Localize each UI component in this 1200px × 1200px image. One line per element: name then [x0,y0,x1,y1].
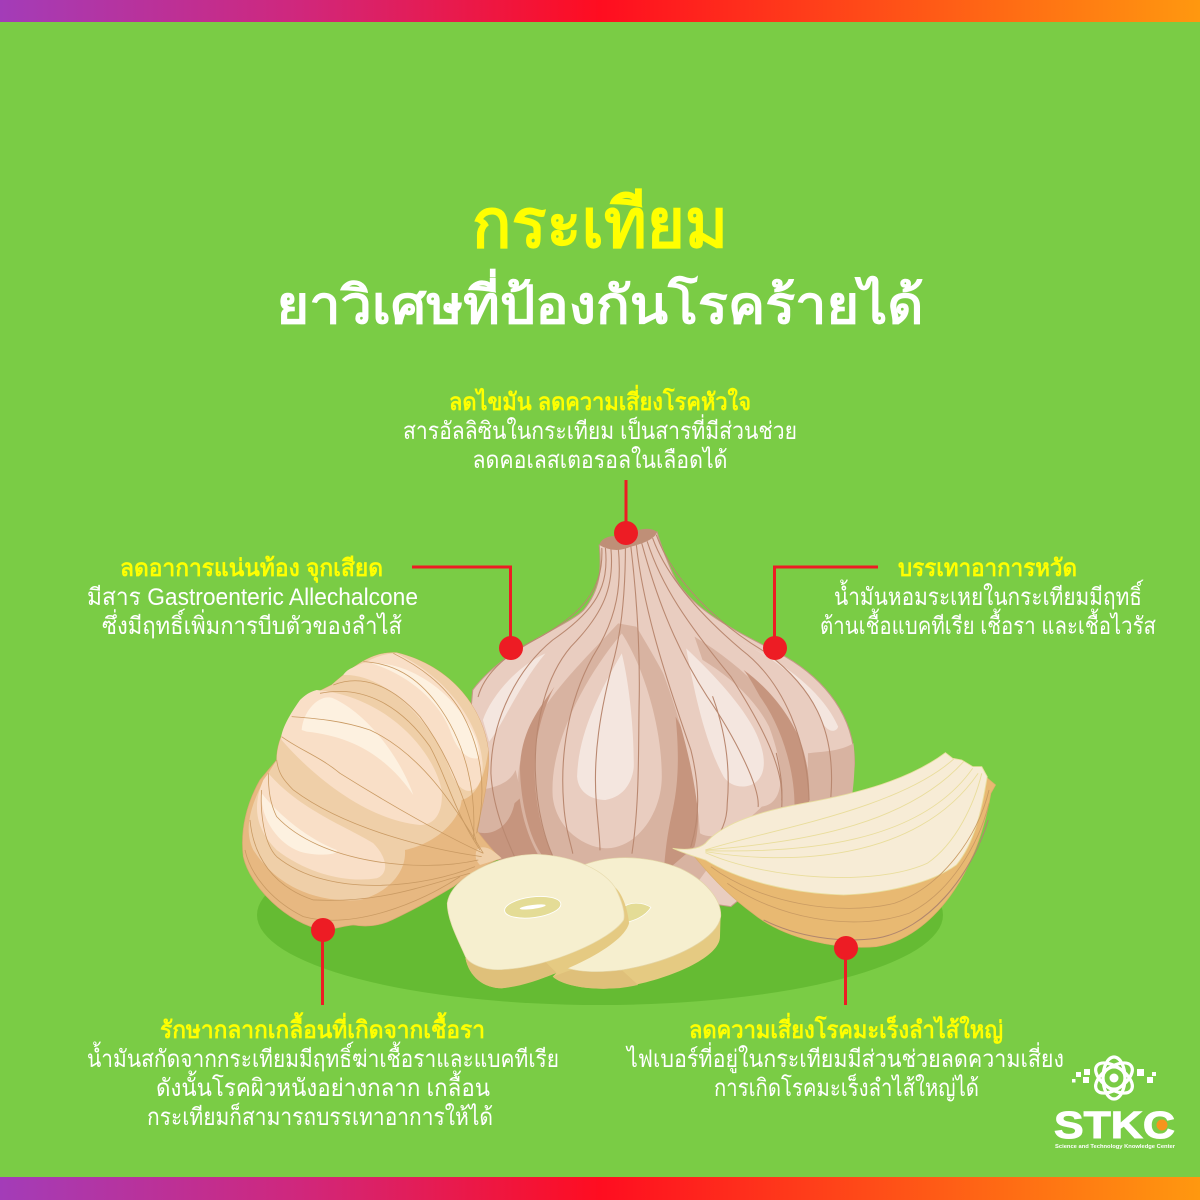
text block: bottom right benefit [625,1012,1064,1102]
front slice shaded rim [465,953,556,988]
wedge skin [695,773,996,947]
callout marker: right [763,567,878,660]
wedge face ribs [705,758,982,878]
illustration: whole garlic bulb [462,529,855,907]
bulb highlights [483,642,838,800]
clove light tone [257,653,483,880]
bulb ribs [478,535,832,863]
heading: left benefit: ลดอาการแน่นท้อง จุกเสียด [120,555,383,584]
heading: top benefit: ลดไขมัน ลดความเสี่ยงโรคหัวใจ [449,384,751,416]
bulb dark streaks [520,670,809,873]
clove mid tone [249,653,488,900]
back slice [553,858,721,989]
text block: bottom left benefit [87,1011,559,1131]
wedge skin ribs [711,790,989,922]
top gradient bar [0,0,1200,22]
bottom gradient bar [0,1177,1200,1200]
back slice face [564,858,721,972]
callout marker: bottom left [311,918,335,1005]
body: left line 1: มีสาร Gastroenteric Allechalcone [87,584,418,611]
callout marker: bottom right [834,936,858,1005]
heading: bottom right benefit: ลดความเสี่ยงโรคมะเร็งลำไส้ใหญ่ [689,1012,1003,1044]
back slice core [622,903,651,923]
heading: bottom left benefit: รักษากลากเกลื้อนที่เกิดจากเชื้อรา [160,1011,485,1044]
bulb right shaded band [695,637,810,830]
front slice core [503,893,562,921]
body: bottom right line 2: การเกิดโรคมะเร็งลำไส้ใหญ่ได้ [714,1073,979,1102]
text block: top benefit [403,384,797,474]
body: top line 1: สารอัลลิซินในกระเทียม เป็นสารที่มีส่วนช่วย [403,414,797,445]
connector lines and markers [311,480,878,1005]
wedge inner face [673,753,987,895]
illustration: garlic slices [447,854,721,989]
bulb far right lower tone [807,743,855,810]
back slice shaded rim [553,970,638,989]
callout marker: left [412,567,523,660]
front slice face [447,854,624,970]
bulb center lobe [552,633,662,848]
callout marker: top [614,480,638,545]
text block: left benefit [87,555,418,640]
ground shadow [257,825,943,1005]
clove body [242,653,500,930]
front slice rim [465,887,629,988]
bulb lower left dark [476,797,560,880]
illustration: peeled clove wedge [673,753,996,947]
bulb body [462,532,855,907]
logo icon: atom [1072,1057,1156,1099]
body: top line 2: ลดคอเลสเตอรอลในเลือดได้ [472,446,728,474]
clove ribs [245,653,483,920]
heading: right benefit: บรรเทาอาการหวัด [898,555,1077,582]
logo: STKC [1054,1057,1176,1150]
bulb left lower tone [476,770,524,840]
body: bottom left line 3: กระเทียมก็สามารถบรรเทาอาการให้ได้ [147,1102,493,1131]
text block: right benefit [820,555,1156,640]
body: right line 1: น้ำมันหอมระเหยในกระเทียมมีฤทธิ์ [834,579,1144,611]
subtitle: ยาวิเศษที่ป้องกันโรคร้ายได้ [276,269,924,335]
bulb right lobe [647,633,781,836]
front slice [447,854,629,988]
clove highlights [262,663,479,855]
title line: garlic: กระเทียม [472,186,728,262]
front slice hole [519,903,546,911]
bulb central shaded band [518,623,724,887]
logo accent dot [1156,1120,1168,1130]
clove tip light [476,847,502,865]
wedge outer edge [764,820,988,940]
bulb stem top [599,529,657,550]
logo wordmark: STKC [1054,1105,1175,1147]
back slice rim [553,913,721,989]
body: bottom left line 2: ดังนั้นโรคผิวหนังอย่างกลาก เกลื้อน [156,1070,490,1102]
body: left line 2: ซึ่งมีฤทธิ์เพิ่มการบีบตัวของลำไส้ [102,608,402,640]
body: bottom left line 1: น้ำมันสกัดจากกระเทียมมีฤทธิ์ฆ่าเชื้อราและแบคทีเรีย [87,1041,559,1073]
illustration: whole clove [242,653,502,930]
logo tagline: Science and Technology Knowledge Center [1055,1144,1176,1150]
title [276,186,924,335]
body: bottom right line 1: ไฟเบอร์ที่อยู่ในกระเทียมมีส่วนช่วยลดความเสี่ยง [625,1042,1064,1074]
